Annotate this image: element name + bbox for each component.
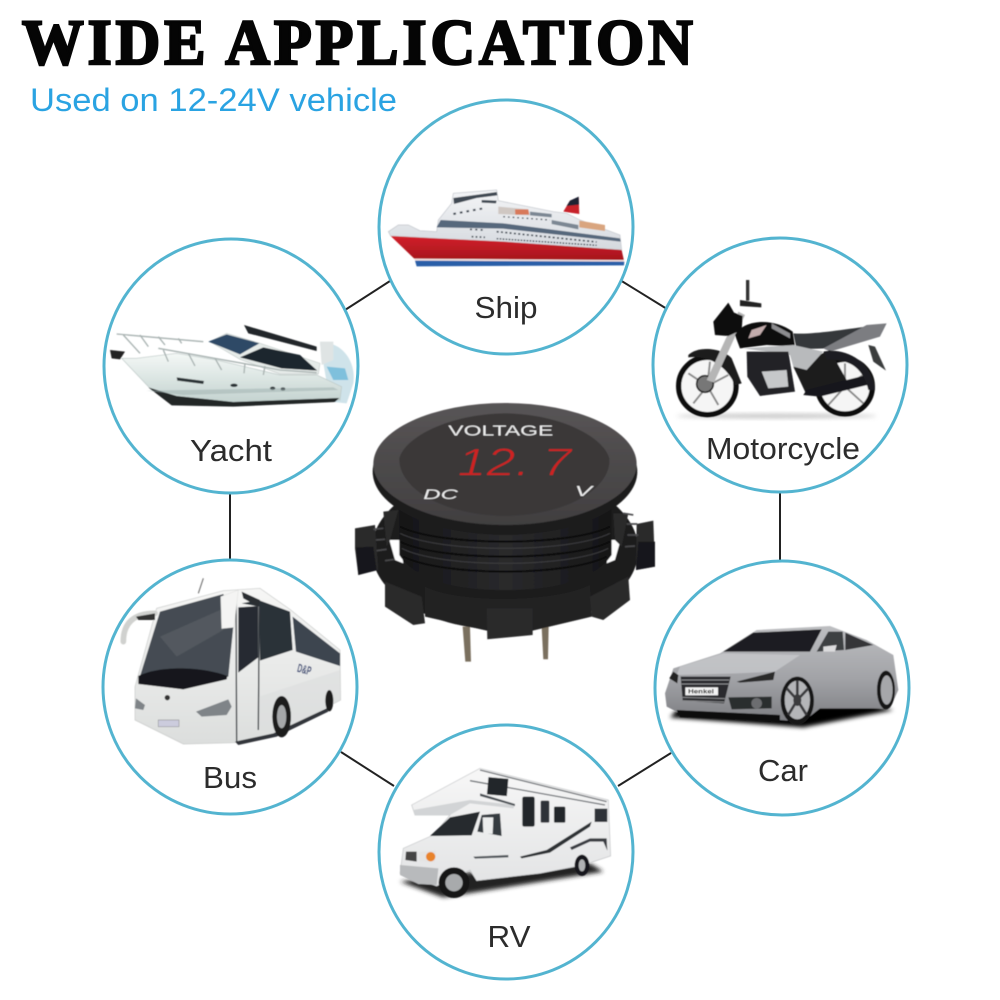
- icon: bus: [123, 578, 341, 745]
- panel: car: [655, 561, 909, 815]
- label: dc: DC: [423, 486, 460, 502]
- label: v: V: [575, 484, 594, 500]
- left skirt block: [385, 582, 425, 625]
- panel: rv: [379, 725, 633, 979]
- icon: car: [665, 626, 898, 727]
- icon: rv: [400, 768, 611, 898]
- right clip tab: [636, 521, 655, 570]
- label: car: Car: [758, 753, 808, 788]
- voltage reading: 12.7: [457, 440, 574, 484]
- mounting ring: [355, 470, 655, 639]
- label: yacht: Yacht: [190, 433, 272, 468]
- threaded body: [399, 483, 612, 590]
- left clip tab: [355, 525, 378, 575]
- face cap: [373, 403, 637, 535]
- panel: yacht: [104, 239, 358, 493]
- icon: ship: [388, 190, 624, 266]
- icon: yacht: [110, 325, 354, 407]
- label: voltage: VOLTAGE: [448, 424, 554, 440]
- pins: [463, 627, 549, 662]
- title: WIDE APPLICATION: [22, 7, 693, 78]
- label: ship: Ship: [474, 290, 538, 325]
- panel: bus: [103, 560, 357, 814]
- label: bus: Bus: [203, 760, 257, 795]
- right skirt block: [590, 577, 630, 620]
- bus livery text: D&P: [296, 661, 313, 678]
- panel: motorcycle: [653, 238, 907, 492]
- voltmeter device: [355, 403, 655, 662]
- subtitle: Used on 12-24V vehicle: [30, 82, 397, 118]
- centre skirt block: [487, 608, 533, 639]
- number plate: [685, 687, 718, 696]
- skirt band: [425, 585, 592, 631]
- panel: ship: [379, 100, 633, 354]
- number plate: Henkel: [688, 689, 714, 696]
- label: rv: RV: [488, 919, 531, 954]
- icon: motorcycle: [677, 280, 887, 418]
- connector lines: [230, 280, 780, 786]
- label: motorcycle: Motorcycle: [706, 431, 860, 466]
